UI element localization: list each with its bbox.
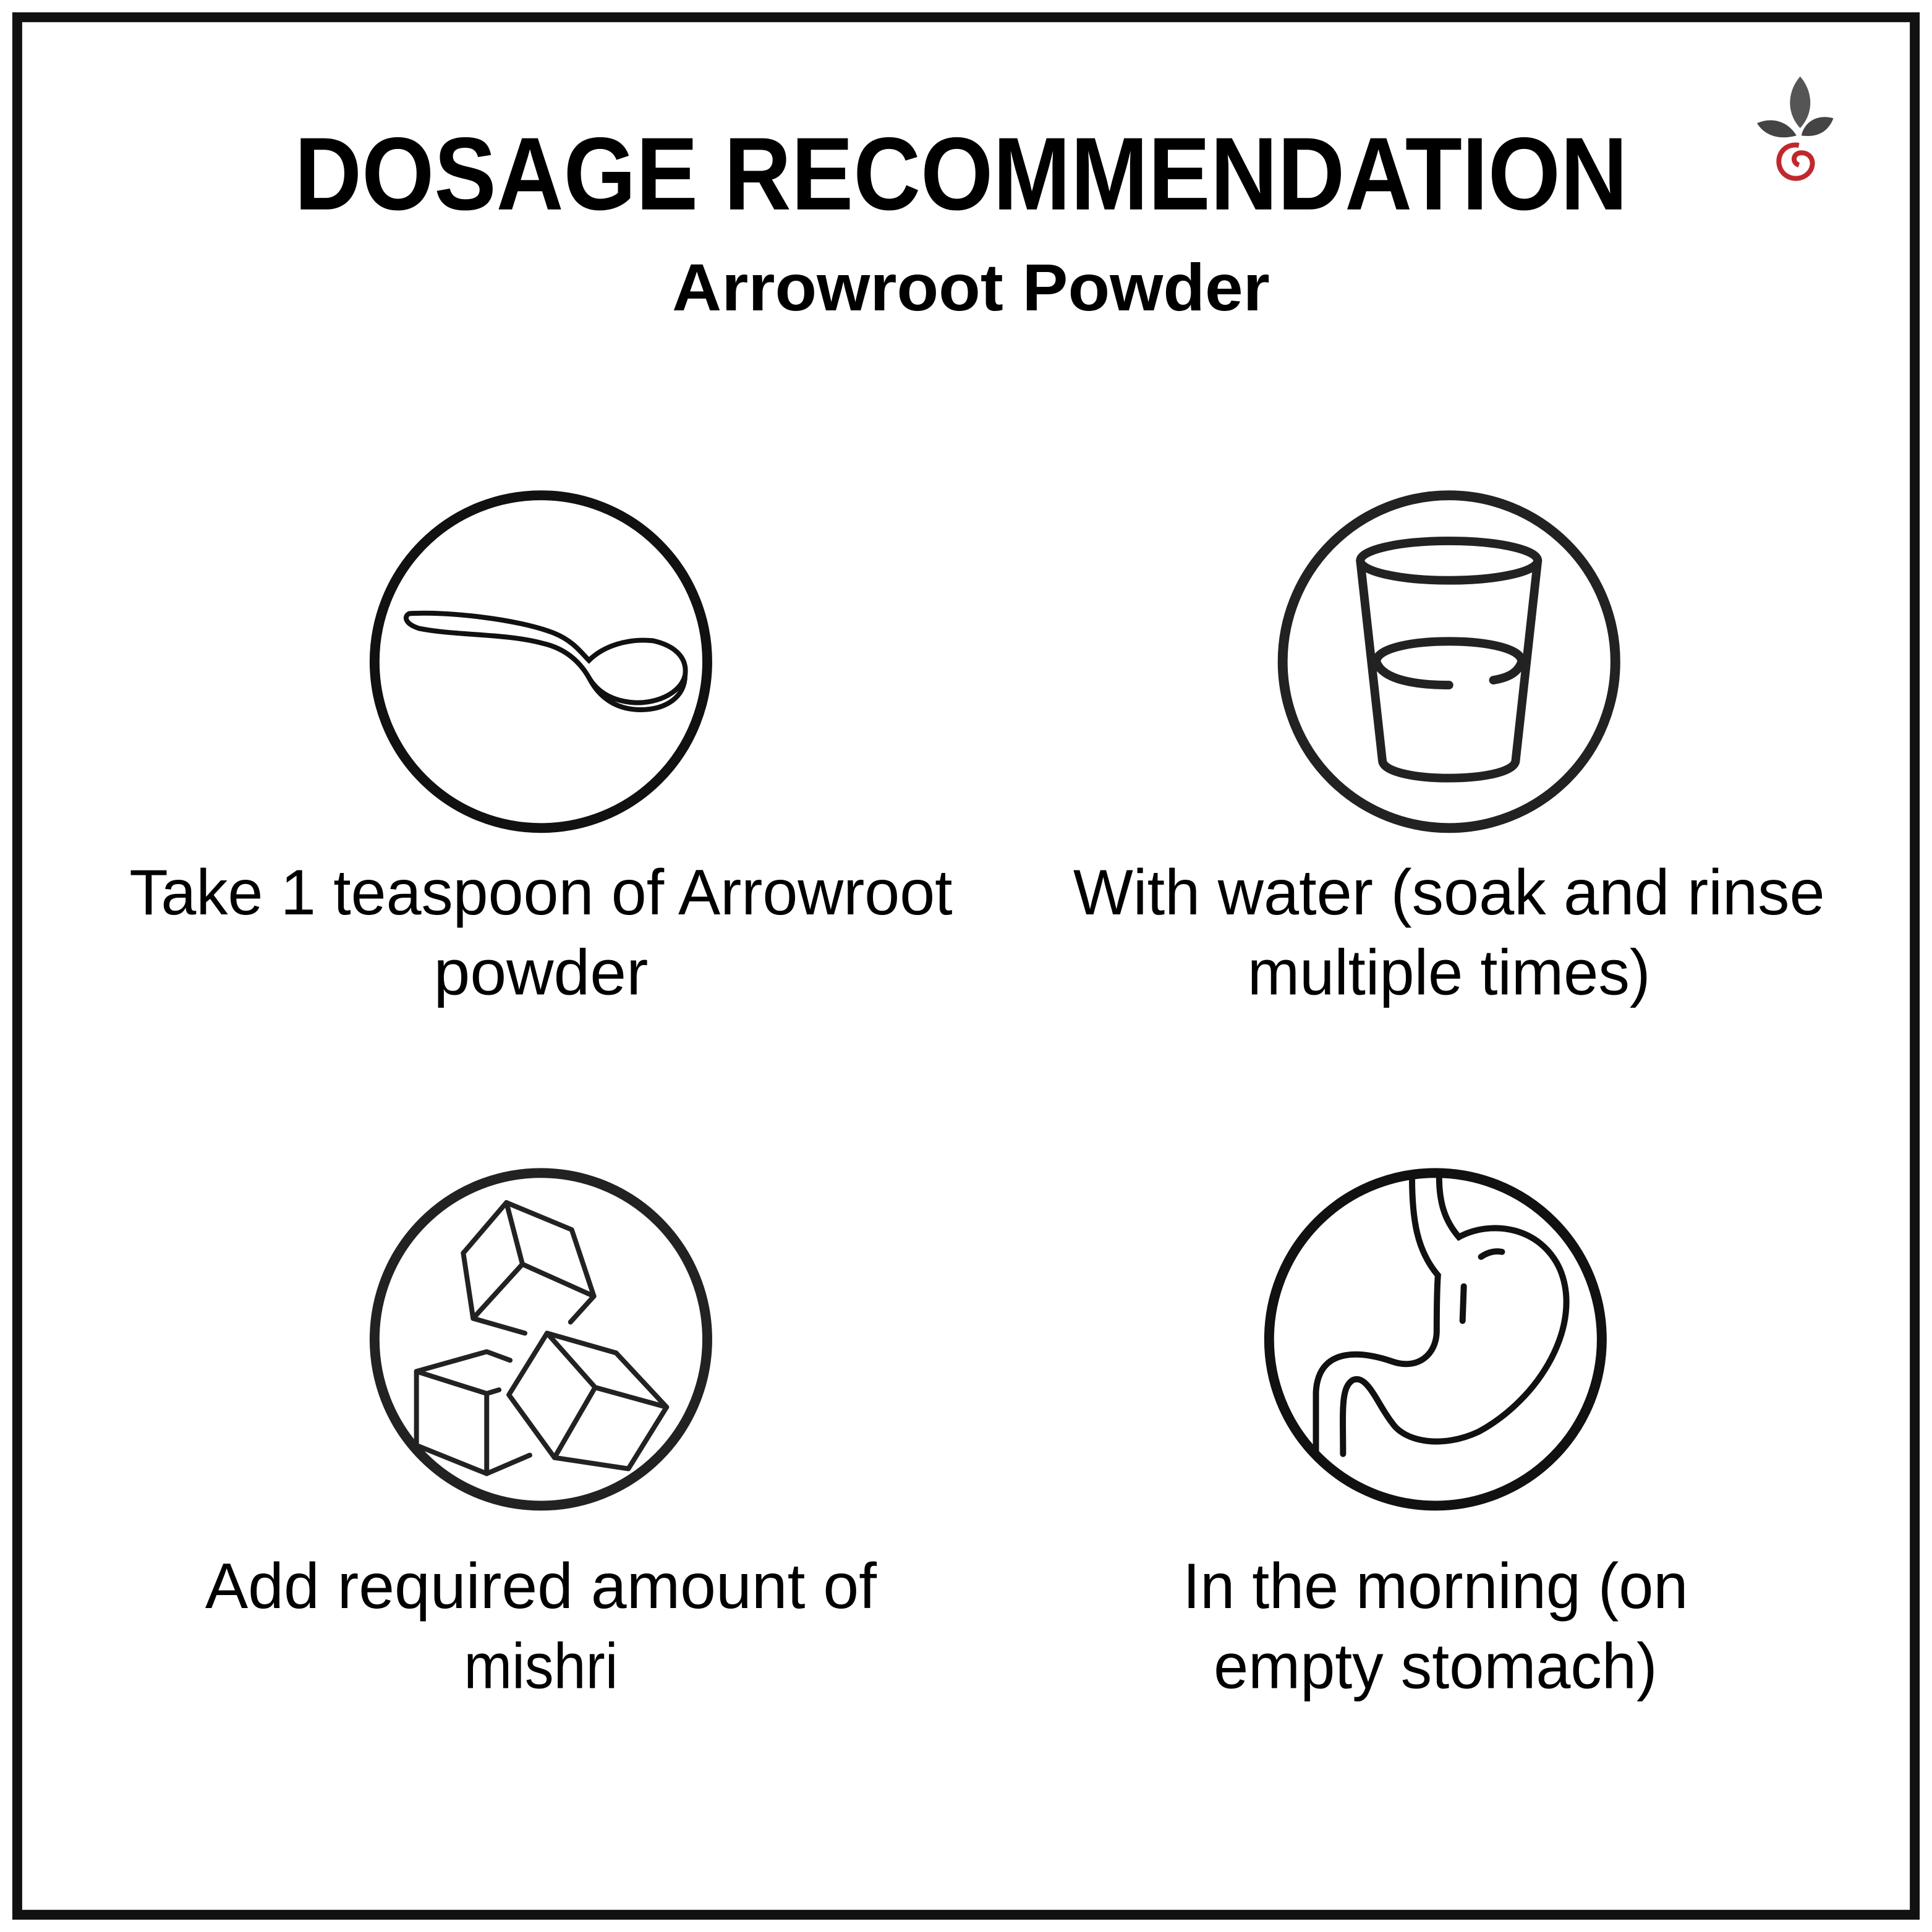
title: DOSAGE RECOMMENDATION — [294, 116, 1628, 232]
panel: morning: empty stomach) — [1214, 1630, 1658, 1701]
subtitle: Arrowroot Powder — [672, 250, 1270, 325]
panel: water — [1073, 495, 1825, 1008]
panel: mishri: mishri — [464, 1630, 618, 1701]
panel: teaspoon: powder — [434, 936, 648, 1008]
text: step 2: With water (soak and rinse — [1073, 856, 1825, 928]
panel: teaspoon — [129, 495, 953, 1008]
panel: water: multiple times) — [1248, 936, 1651, 1008]
icon: stomach — [1269, 1173, 1602, 1505]
panel: morning — [1183, 1173, 1688, 1701]
text: step 1: Take 1 teaspoon of Arrowroot — [129, 856, 953, 928]
icon: sugar cubes — [375, 1173, 707, 1505]
text: step 3: Add required amount of — [205, 1550, 877, 1622]
icon: spoon — [375, 495, 707, 828]
panel: mishri — [205, 1173, 877, 1701]
text: step 4: In the morning (on — [1183, 1550, 1688, 1622]
icon: glass of water — [1283, 495, 1615, 828]
icon: logo — [1757, 77, 1834, 179]
